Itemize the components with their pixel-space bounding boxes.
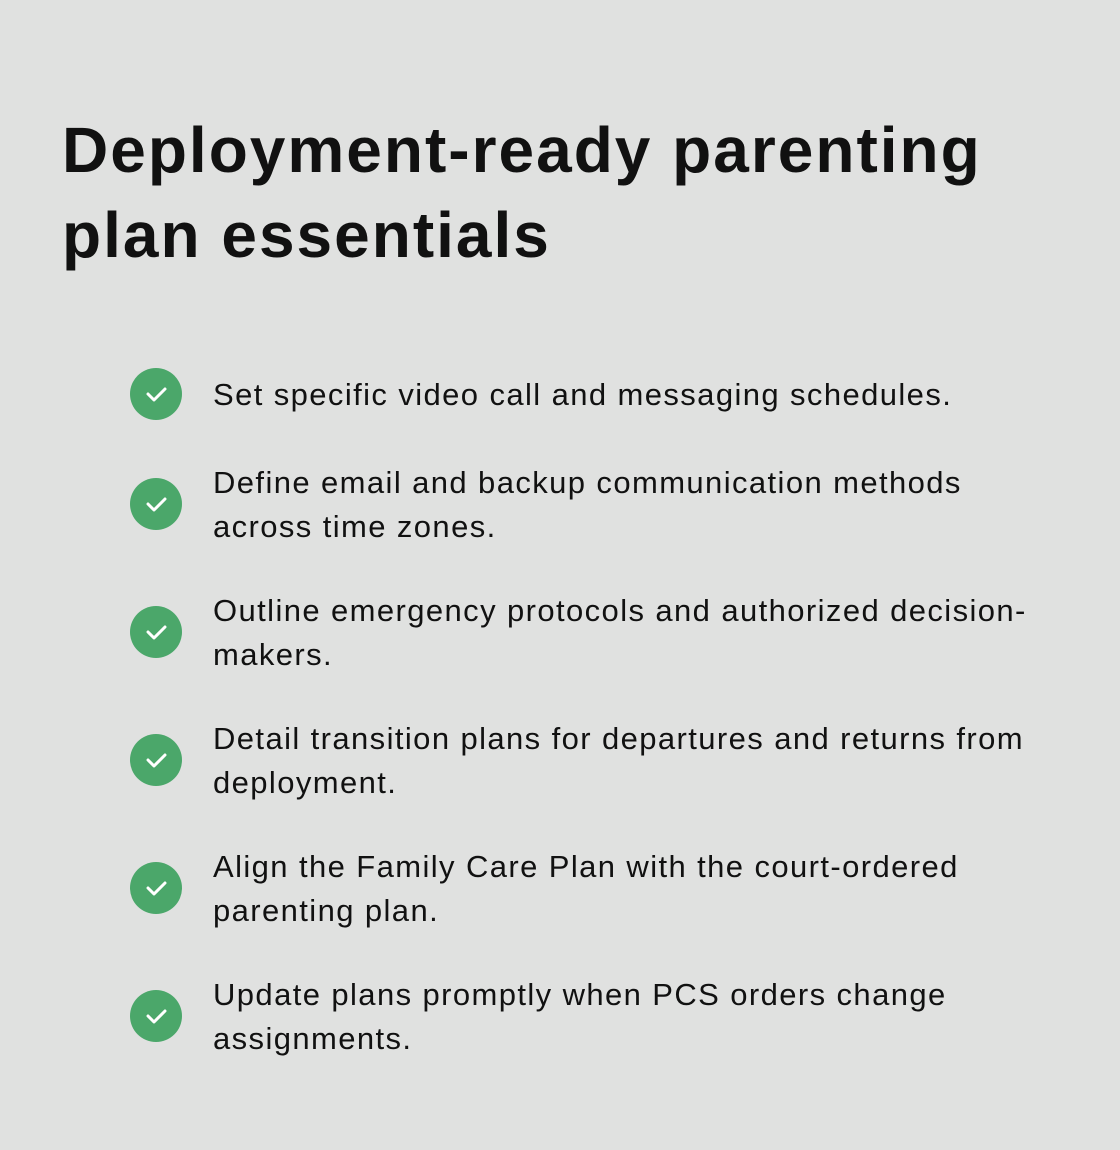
text 5 [213, 849, 959, 928]
text 3: Outline emergency protocols and authorized decision- [213, 593, 1027, 628]
text 6 [213, 977, 947, 1056]
item 3 [130, 593, 1027, 672]
text 6: assignments. [213, 1021, 412, 1056]
text 4 [213, 721, 1024, 800]
icon: check 4 [130, 734, 182, 786]
icon: check 3 [130, 606, 182, 658]
icon: check 5 [130, 862, 182, 914]
item 6 [130, 977, 947, 1056]
text 2 [213, 465, 962, 544]
item 5 [130, 849, 959, 928]
item 4 [130, 721, 1024, 800]
text 5: parenting plan. [213, 893, 439, 928]
icon: check 2 [130, 478, 182, 530]
text 6: Update plans promptly when PCS orders change [213, 977, 947, 1012]
title: plan essentials [62, 199, 551, 271]
text 4: Detail transition plans for departures and returns from [213, 721, 1024, 756]
text 5: Align the Family Care Plan with the court-ordered [213, 849, 959, 884]
text 3 [213, 593, 1027, 672]
text 2: Define email and backup communication methods [213, 465, 962, 500]
title: Deployment-ready parenting [62, 114, 982, 186]
text 1: Set specific video call and messaging schedules. [213, 377, 952, 412]
icon: check 6 [130, 990, 182, 1042]
title [62, 114, 982, 271]
text 2: across time zones. [213, 509, 497, 544]
text 3: makers. [213, 637, 333, 672]
text 4: deployment. [213, 765, 397, 800]
item 1 [130, 368, 952, 420]
item 2 [130, 465, 962, 544]
icon: check 1 [130, 368, 182, 420]
